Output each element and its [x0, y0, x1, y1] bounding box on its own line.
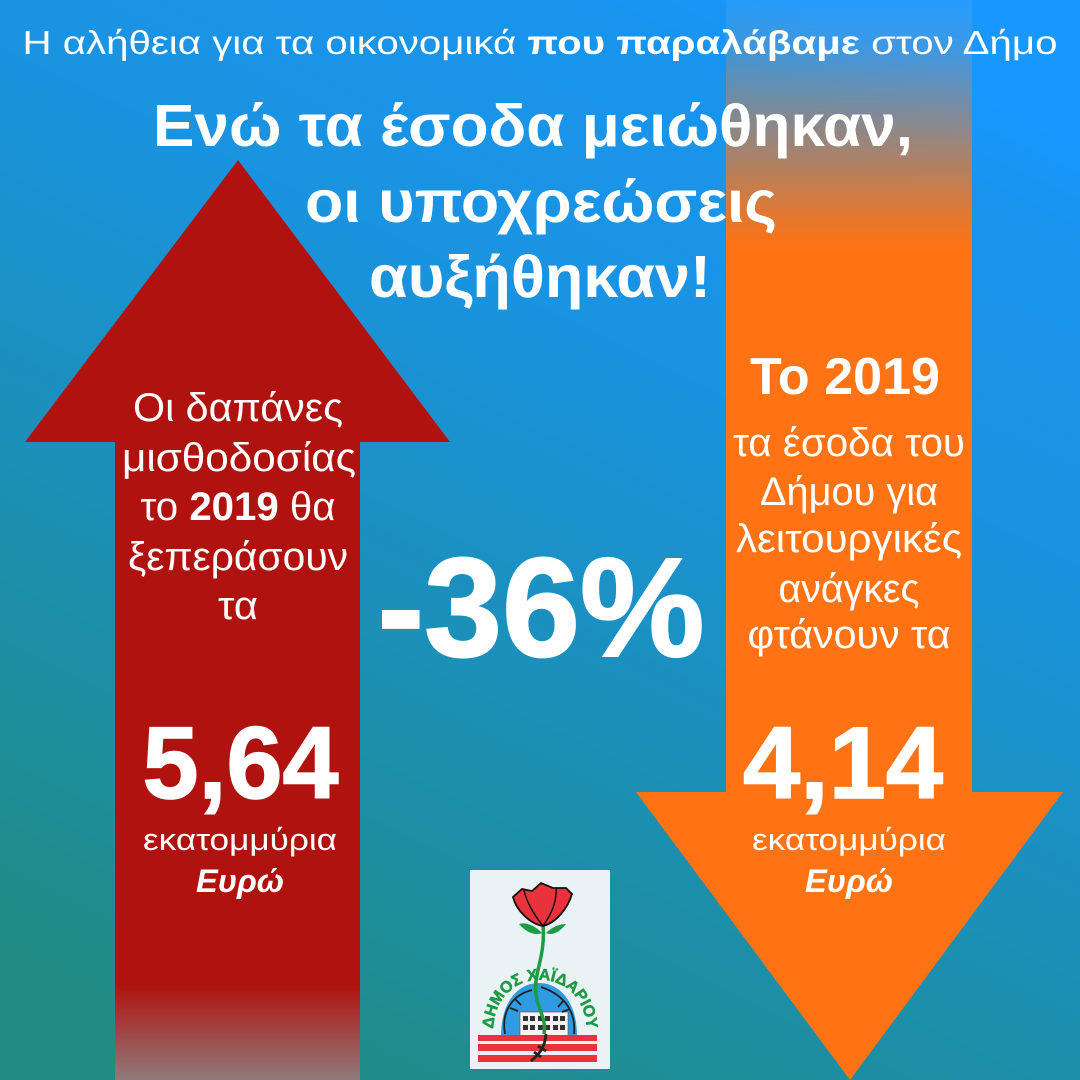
left arrow text: payroll: το 2019 θα [140, 485, 336, 529]
left arrow text: payroll: Οι δαπάνες [133, 386, 343, 430]
headline: Ενώ τα έσοδα μειώθηκαν, [153, 93, 913, 159]
logo stem and leaves [519, 923, 566, 1034]
right arrow text: revenue: Το 2019 [750, 348, 940, 406]
right unit [752, 822, 946, 899]
left arrow text: payroll [122, 386, 356, 628]
headline [153, 93, 913, 310]
right arrow text: revenue: φτάνουν τα [748, 613, 950, 657]
right arrow text: revenue: Δήμου για [760, 470, 938, 514]
left value: 5,64: 5,64 [142, 706, 339, 820]
left arrow text: payroll: τα [218, 584, 258, 628]
left arrow text: payroll: μισθοδοσίας [122, 436, 356, 480]
logo building [520, 1012, 568, 1036]
headline: αυξήθηκαν! [369, 244, 711, 310]
right arrow text: revenue: τα έσοδα του [733, 421, 965, 465]
left unit: εκατομμύρια [143, 822, 337, 857]
right value: 4,14: 4,14 [743, 706, 943, 820]
left arrow text: payroll: ξεπεράσουν [128, 535, 348, 579]
left unit: Ευρώ [196, 863, 284, 899]
logo globe [501, 983, 577, 1036]
logo stripes [478, 1035, 597, 1062]
logo flower [513, 883, 572, 926]
right unit: Ευρώ [805, 863, 893, 899]
arrow: up red [25, 160, 450, 1080]
logo name: ΔΗΜΟΣ ΧΑΪΔΑΡΙΟΥ [482, 967, 598, 1028]
logo broken wire [531, 1034, 546, 1061]
logo: Δήμος Χαϊδαρίου [470, 870, 610, 1069]
right unit: εκατομμύρια [752, 822, 946, 857]
right arrow text: revenue: ανάγκες [778, 567, 920, 611]
headline: οι υποχρεώσεις [305, 169, 777, 235]
right arrow text: revenue: λειτουργικές [736, 517, 962, 561]
logo barbed wire [504, 987, 574, 1034]
center percentage: -36% [378, 528, 704, 686]
arrow: down orange [636, 0, 1063, 1080]
top title: Η αλήθεια για τα οικονομικά που παραλάβαμε στον Δήμο [22, 24, 1057, 61]
left unit [143, 822, 337, 899]
right arrow text: revenue [733, 348, 965, 657]
